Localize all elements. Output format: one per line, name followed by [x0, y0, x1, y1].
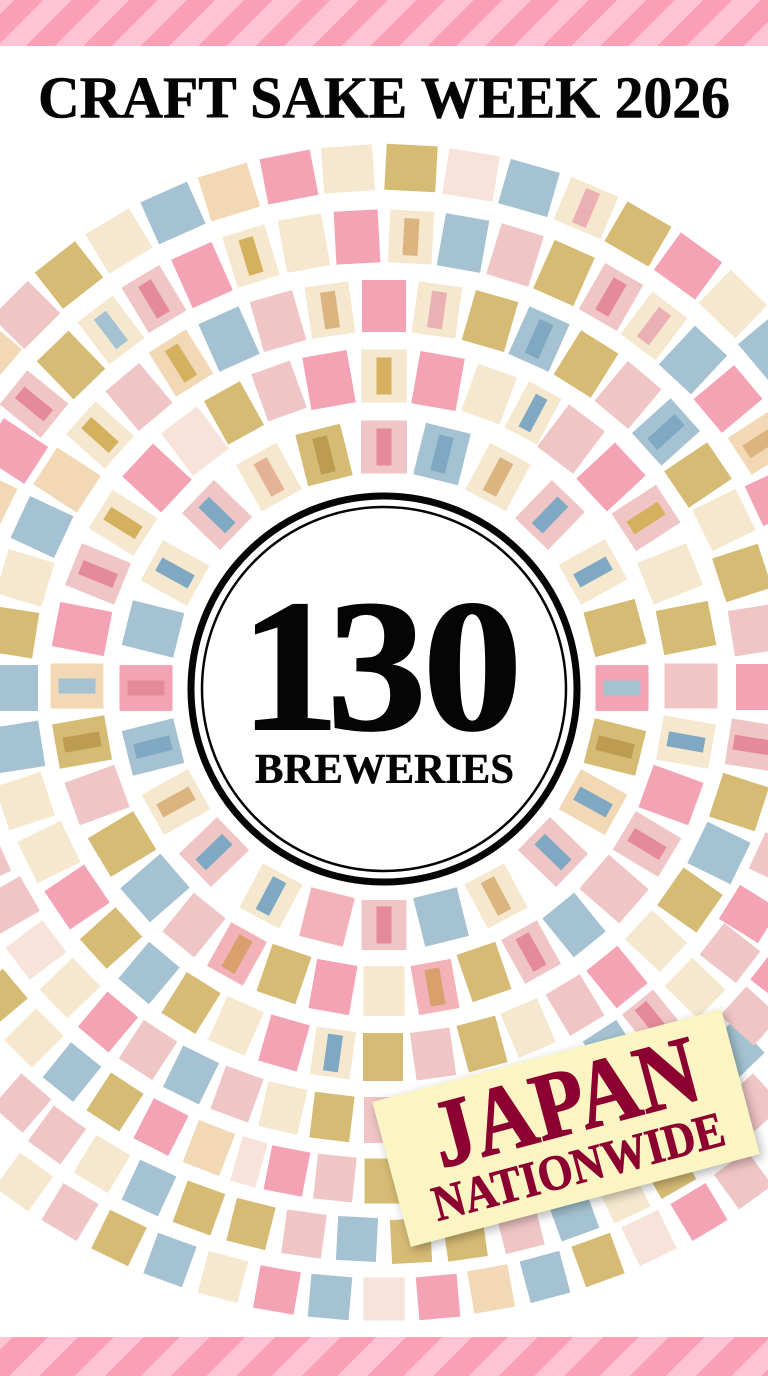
ring 1 tiles [120, 420, 648, 950]
ring 5 top arc tiles [0, 144, 768, 388]
ring 3 tiles [0, 280, 768, 1081]
badge label: BREWERIES [255, 747, 514, 793]
outer lower ring tiles at y 1298 [0, 1151, 768, 1320]
lower ring tiles at y 1240 [0, 1073, 768, 1264]
ring 4 tiles [0, 209, 768, 1143]
sticker main word: JAPAN [419, 1015, 710, 1188]
bottom striped band [0, 1337, 768, 1376]
center badge [191, 496, 577, 882]
sticker secondary word: NATIONWIDE [426, 1101, 730, 1232]
top striped band [0, 0, 768, 46]
badge number: 130 [240, 561, 522, 770]
callout: Japan Nationwide sticker [371, 1005, 760, 1247]
ring 2 tiles [50, 350, 718, 1016]
title: CRAFT SAKE WEEK 2026 [38, 64, 730, 130]
lower ring tiles at y 1181 [0, 949, 768, 1204]
